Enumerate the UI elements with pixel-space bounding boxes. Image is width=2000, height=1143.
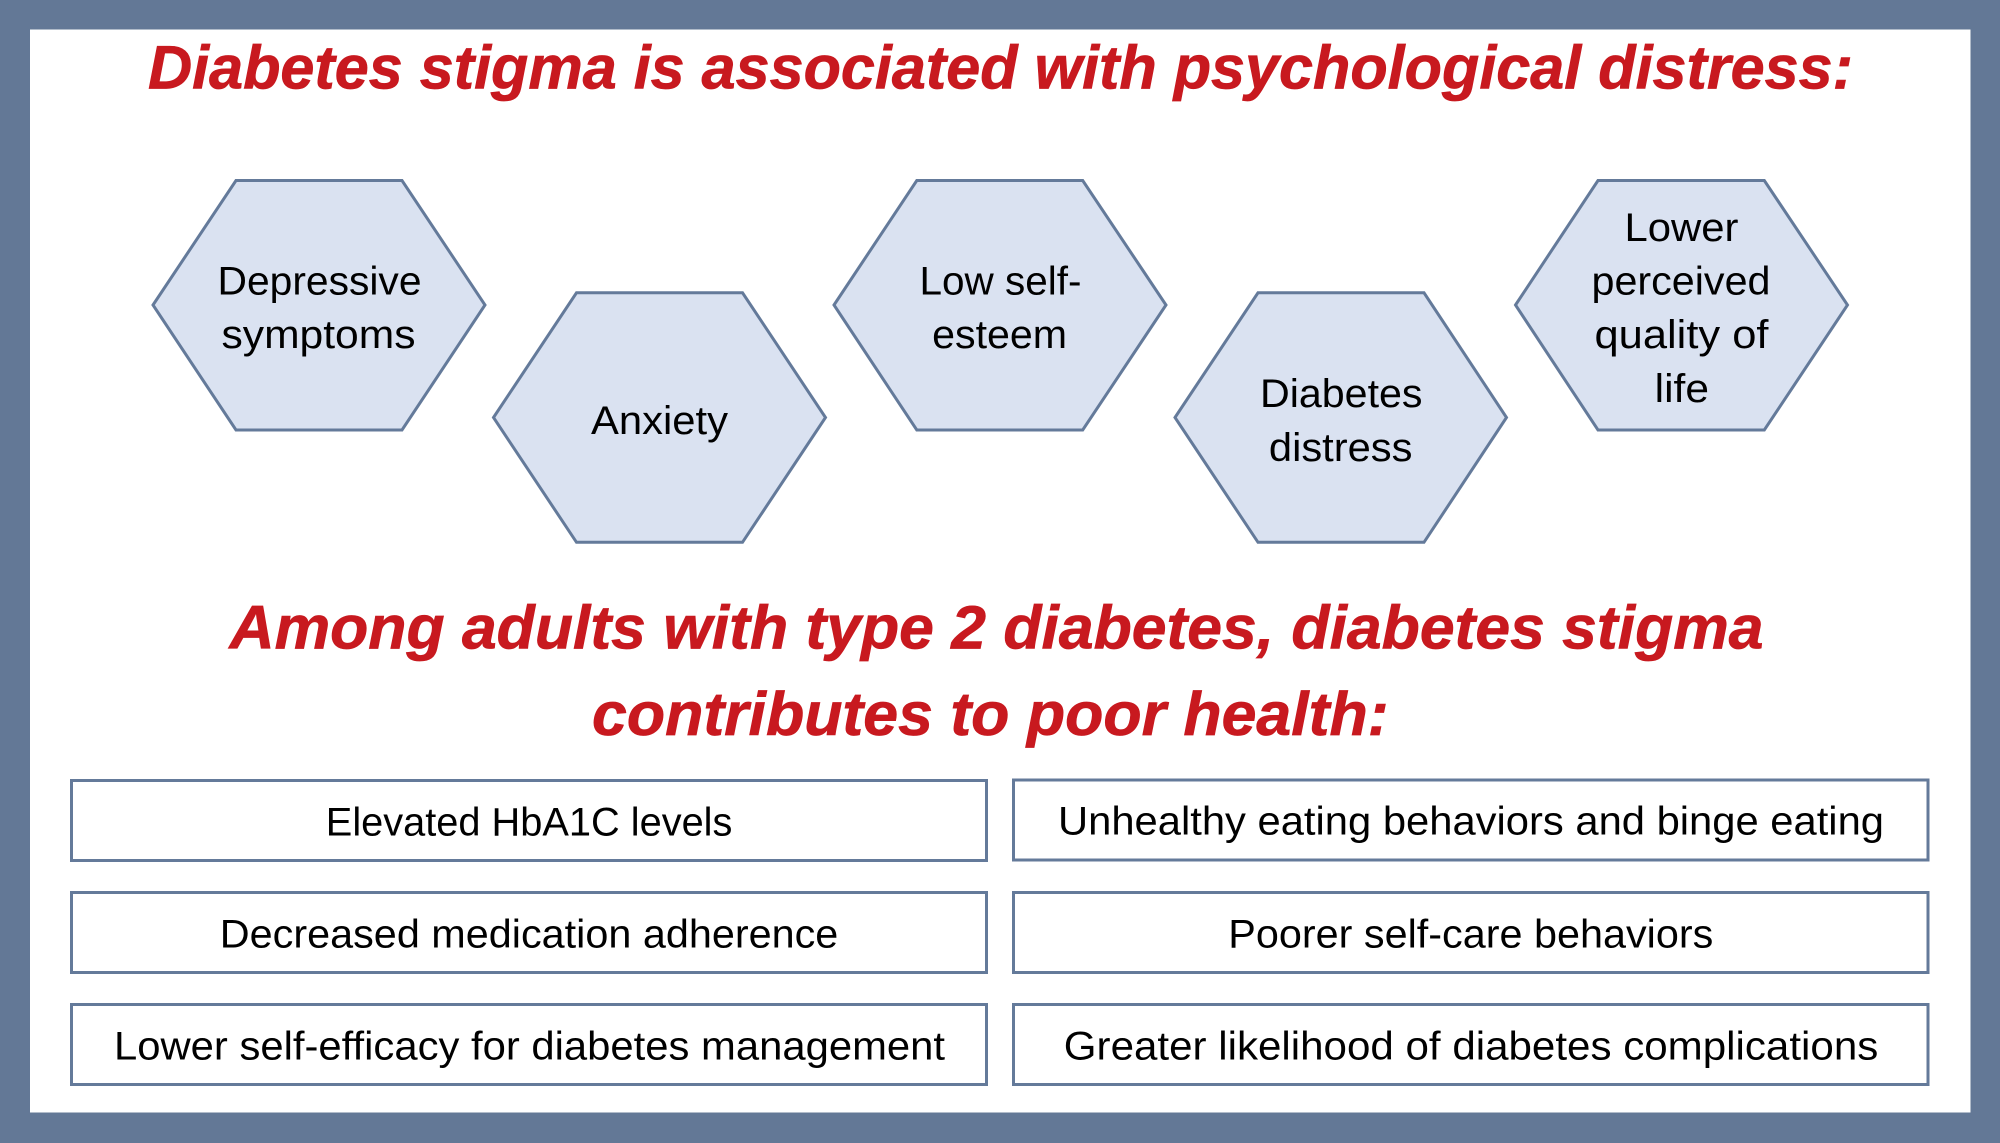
hexagon: lower perceived quality of life: life xyxy=(1655,367,1709,411)
box: elevated HbA1C levels: Elevated HbA1C levels xyxy=(326,801,732,845)
hexagon: diabetes distress xyxy=(1175,293,1506,542)
title: psychological distress heading: Diabetes stigma is associated with psychological distress: xyxy=(148,34,1853,102)
hexagon: depressive symptoms: symptoms xyxy=(222,313,416,357)
hexagon: diabetes distress: Diabetes xyxy=(1260,372,1422,416)
box: lower self-efficacy xyxy=(72,1004,986,1084)
hexagon: anxiety: Anxiety xyxy=(591,399,728,443)
box: lower self-efficacy: Lower self-efficacy for diabetes management xyxy=(114,1025,945,1069)
heading: poor health in type 2 diabetes: contributes to poor health: xyxy=(592,680,1389,748)
box: elevated HbA1C levels xyxy=(72,780,986,860)
box: poorer self-care behaviors: Poorer self-care behaviors xyxy=(1228,913,1713,957)
hexagon: depressive symptoms xyxy=(153,180,485,430)
hexagon: lower perceived quality of life: quality of xyxy=(1594,313,1770,357)
heading: poor health in type 2 diabetes: Among adults with type 2 diabetes, diabetes stigma xyxy=(227,594,1764,662)
hexagon: low self-esteem xyxy=(834,180,1166,430)
box: diabetes complications: Greater likelihood of diabetes complications xyxy=(1064,1024,1878,1068)
box: poorer self-care behaviors xyxy=(1014,892,1928,972)
hexagon: lower perceived quality of life: perceived xyxy=(1592,259,1770,303)
heading: poor health in type 2 diabetes xyxy=(227,594,1764,748)
hexagon: depressive symptoms: Depressive xyxy=(218,259,422,303)
hexagon: lower perceived quality of life: Lower xyxy=(1624,206,1738,250)
panel: health outcome boxes xyxy=(72,780,1928,1084)
hexagon: low self-esteem: esteem xyxy=(932,313,1067,357)
hexagon: diabetes distress: distress xyxy=(1269,426,1412,470)
box: unhealthy eating behaviors: Unhealthy eating behaviors and binge eating xyxy=(1058,799,1884,843)
box: diabetes complications xyxy=(1014,1004,1928,1084)
panel: psychological distress hexagons xyxy=(153,180,1848,542)
hexagon: low self-esteem: Low self- xyxy=(920,259,1082,303)
box: unhealthy eating behaviors xyxy=(1014,780,1928,860)
hexagon: lower perceived quality of life xyxy=(1516,180,1848,430)
box: decreased medication adherence xyxy=(72,892,986,972)
box: decreased medication adherence: Decreased medication adherence xyxy=(220,913,838,957)
hexagon: anxiety xyxy=(494,293,826,542)
